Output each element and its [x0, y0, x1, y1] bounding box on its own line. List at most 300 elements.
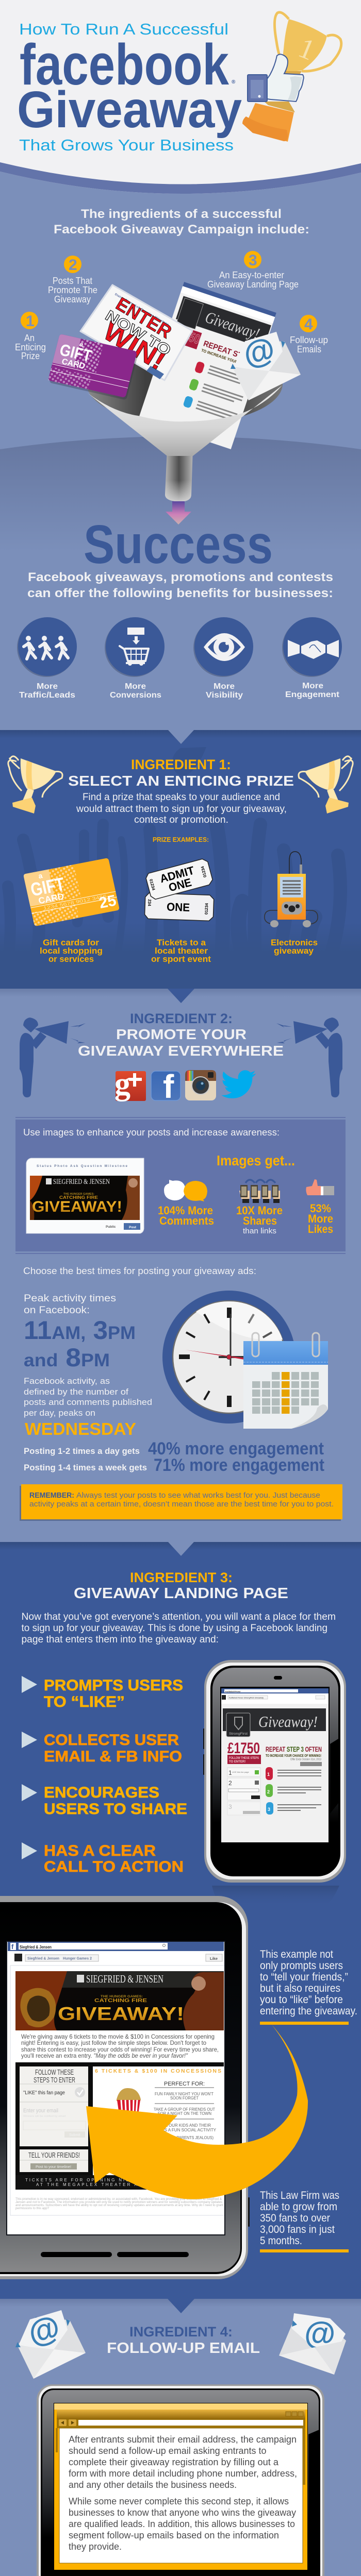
badge 2: 2 [69, 257, 77, 274]
benefit: more engagement [282, 617, 342, 699]
benefit: more visibility [193, 617, 253, 700]
email body text: businesses to know that anyone who wins the giveaway [69, 2507, 296, 2518]
arrow: curved callout arrow [86, 2025, 308, 2199]
title line: that grows your business: That Grows Your Business [19, 136, 234, 154]
bullet: prompts users: TO “LIKE” [44, 1693, 125, 1710]
heading: ingredient 3: INGREDIENT 3: [130, 1570, 233, 1585]
label: or sport event [151, 954, 211, 964]
label: landing page [207, 270, 299, 290]
screenshot: facebook post: Post [129, 1226, 137, 1229]
text: example description: you to “like” before [260, 1994, 343, 2006]
text: ingredient 1 body: Find a prize that speaks to your audience and [83, 792, 280, 803]
stat: peak times: and 8PM [24, 1343, 110, 1372]
post composer card with enter now to win [80, 285, 192, 380]
screen: landing page: REPEAT STEP 3 OFTEN [266, 1745, 322, 1753]
label: posts: Giveaway [54, 294, 91, 304]
tell friends box: TELL YOUR FRIENDS! [28, 2151, 80, 2160]
text: law firm result: 5 months. [260, 2235, 302, 2247]
funnel interior [87, 344, 283, 424]
label [285, 682, 340, 699]
prizes box: 6 TICKETS & $100 IN CONCESSIONS [95, 2068, 221, 2074]
icon: upper ticket [145, 858, 214, 900]
disclaimer [15, 2198, 223, 2210]
icon: popcorn [117, 2088, 141, 2122]
tell friends box: Post to your timeline! [36, 2164, 71, 2169]
registered mark: ® [232, 79, 236, 85]
prize: gift card [23, 858, 120, 964]
prizes box: FOR A NIGHT ON THE TOWN [158, 2111, 211, 2116]
text: facebook activity: defined by the number of [24, 1387, 128, 1397]
label: posts: Promote The [48, 285, 97, 295]
badge 3: 3 [249, 252, 257, 269]
callout: remember [20, 1484, 342, 1521]
screen: landing page: FOLLOW THESE STEPS [229, 1757, 259, 1760]
icon: clock [162, 1291, 296, 1423]
label [19, 682, 75, 700]
label: More [214, 682, 235, 691]
notch into ingredient 4 [168, 2299, 194, 2313]
icon: left trophy [8, 756, 62, 814]
steps box: Submit [69, 2133, 80, 2137]
facebook header bar: f [11, 1943, 14, 1951]
steps box: STEPS TO ENTER [34, 2076, 75, 2084]
icon: right envelope: @ [304, 2316, 335, 2351]
giveaway banner: CATCHING FIRE [94, 1998, 147, 2004]
screen: landing page: Kettlebell Fever StrongFirst Giveaway [229, 1696, 264, 1699]
icon: calendar [243, 1333, 328, 1429]
icon: upper ticket: 01234 [149, 878, 156, 891]
icon: orange gift card: CARD [38, 891, 65, 906]
screen: landing page: 2 [267, 1789, 270, 1794]
icon: lower ticket [144, 893, 214, 921]
screen: landing page: StrongFirst [229, 1733, 248, 1736]
screenshot: facebook post: Public [106, 1225, 116, 1229]
text: 104% More [158, 1204, 213, 1217]
label: landing page: An Easy-to-enter [219, 270, 284, 280]
steps box [20, 2066, 88, 2146]
funnel tube [165, 448, 193, 502]
tickets footer strip: AT THE MEGAPLEX THEATER AT THE GATEWAY [36, 2182, 191, 2187]
heading: ingredient 2 [78, 1011, 284, 1059]
badge 2 [64, 256, 81, 274]
giveaway description: you'll receive an extra entry. "May the odds be ever in your favor!" [21, 2052, 188, 2059]
heading: ingredient 4 [107, 2324, 260, 2357]
disclaimer: This promotion is in no way sponsored, endorsed or administered by, or associated with, Facebook. You are providing your information to Siegfried & [15, 2198, 222, 2201]
icon: walking people [24, 636, 68, 659]
text [158, 1204, 214, 1227]
purple gift card [47, 334, 139, 400]
screen: facebook giveaway page [6, 1941, 225, 2235]
ingredient list [15, 251, 328, 361]
laptop [4, 2384, 357, 2576]
heading: ingredient 2: INGREDIENT 2: [130, 1011, 233, 1026]
facebook header bar: Siegfried & Jensen [20, 1945, 52, 1950]
text: peak activity: on Facebook: [24, 1305, 90, 1316]
label: More [125, 682, 146, 691]
text: law firm result: able to grow from [260, 2201, 337, 2213]
text: example description: only prompts users [260, 1960, 343, 1972]
screenshot: facebook post: GIVEAWAY! [32, 1198, 122, 1215]
label: prize examples: PRIZE EXAMPLES: [153, 836, 209, 843]
text: ingredient 3 body [22, 1612, 336, 1645]
heading: ingredient 3 [74, 1570, 288, 1602]
tickets footer strip [15, 2175, 224, 2190]
stat: wednesday: WEDNESDAY [25, 1419, 136, 1438]
prizes box: SOON FORGET [170, 2096, 199, 2100]
email body text: segment follow-up emails based on the information [69, 2530, 279, 2540]
bullet: encourages: ENCOURAGES [44, 1784, 159, 1801]
icon: twitter [221, 1070, 256, 1098]
heading: ingredient 1: SELECT AN ENTICING PRIZE [68, 773, 294, 789]
label: More [302, 682, 323, 690]
stat: likes [306, 1179, 334, 1235]
tickets footer strip: TICKETS ARE FOR OPENING NIGHT (THURSDAY) [25, 2178, 180, 2182]
heading: ingredient 2: PROMOTE YOUR [116, 1026, 247, 1042]
icon: speech bubbles [164, 1180, 207, 1201]
icon: left megaphone man [20, 1018, 86, 1097]
browser window [54, 2403, 307, 2570]
icon: facebook: f [163, 1068, 174, 1105]
label: enticing prize: Enticing [15, 342, 46, 352]
page nav [10, 1954, 224, 2215]
bullet: call to action: HAS A CLEAR [44, 1842, 156, 1859]
post composer card with enter now to win: WIN! [98, 316, 171, 376]
text: peak activity [24, 1293, 116, 1316]
badge 1 [21, 312, 38, 330]
steps box: FOLLOW THESE [35, 2068, 74, 2077]
purple gift card: GIFT [58, 340, 94, 365]
bullet: collects email: COLLECTS USER [44, 1732, 179, 1749]
label [40, 938, 103, 964]
icon: phones in hands [239, 1180, 280, 1203]
heading: ingredients intro: The ingredients of a successful [81, 207, 282, 221]
text: ingredient 3 body: Now that you’ve got everyone’s attention, you will want a place for them [22, 1612, 336, 1622]
landing page card: REPEAT STEP 3 [202, 339, 258, 365]
email body text: form with more detail including phone number, address, [69, 2468, 297, 2479]
bullet: encourages: USERS TO SHARE [44, 1801, 187, 1818]
heading: ingredients intro: Facebook Giveaway Campaign include: [54, 223, 309, 236]
landing page card [139, 282, 276, 449]
prizes box: TAKE A GROUP OF FRIENDS OUT [154, 2107, 215, 2112]
label: posts: Posts That [53, 276, 92, 286]
benefit: more conversions [105, 617, 165, 700]
title block [17, 20, 242, 154]
icon: orange gift card: 1234 5678 9012 3456 [43, 893, 107, 911]
purple gift card: a [78, 340, 85, 348]
screen: landing page: 2 [228, 1780, 232, 1787]
label: Traffic/Leads [19, 691, 75, 700]
text: Shares [243, 1214, 277, 1227]
landing page card: Giveaway! [203, 308, 262, 343]
text: ingredient 1 body: would attract them to sign up for your giveaway, [76, 804, 287, 815]
prizes box: FUN FAMILY NIGHT YOU WON'T [155, 2092, 214, 2096]
post composer card with enter now to win: NOW TO [102, 308, 174, 359]
screen: landing page: 1 [267, 1772, 270, 1777]
giveaway description: share this contest to increase your odds of winning! For every time you share, [21, 2046, 219, 2053]
page nav: Siegfried & Jensen [27, 1956, 59, 1961]
badge 4 [300, 315, 317, 333]
label: posts [48, 276, 97, 304]
bullet: call to action [22, 1842, 184, 1875]
text: use images: Use images to enhance your posts and increase awareness: [23, 1127, 280, 1138]
icon: upper ticket: 01234 [200, 866, 207, 878]
notch into ingredient 3 [168, 1542, 194, 1556]
prize: electronics [265, 852, 318, 956]
email body text [69, 2434, 297, 2552]
disclaimer: permissions to this app? [15, 2207, 50, 2210]
icon: orange gift card: a [38, 871, 43, 880]
text: facebook activity: Facebook activity, as [24, 1376, 110, 1386]
funnel with ingredients [47, 282, 301, 524]
bullet: encourages [22, 1784, 187, 1818]
text: benefits intro: can offer the following benefits for businesses: [27, 586, 333, 600]
label: follow-up emails: Emails [297, 344, 321, 354]
post composer card with enter now to win: Status Photo Ask Question Milestone [114, 293, 169, 327]
screen: landing page: 3 [228, 1803, 232, 1810]
social icons [114, 1066, 256, 1105]
screen: landing page: Offer Ends October 31st, 2013 [290, 1758, 321, 1761]
icon: facebook [151, 1068, 180, 1105]
callout: remember: REMEMBER: [29, 1491, 74, 1500]
email body text: are qualified leads. In addition, this allows businesses to [69, 2519, 295, 2529]
phone: siegfried jensen mockup [0, 1896, 250, 2279]
label: follow-up emails: Follow-up [290, 335, 328, 345]
email body text: While some never complete this second step, it allows [69, 2496, 289, 2506]
label [151, 938, 211, 964]
icon: google plus: g [114, 1066, 130, 1101]
disclaimer: and announcements. Subscribers will have the ability to opt out of receiving company updates and announcements at any time. Why do I need to grant [15, 2204, 223, 2207]
purple gift card: CARD [61, 357, 86, 371]
icon: left envelope [15, 2309, 86, 2379]
page nav: Hunger Games 2 [63, 1956, 92, 1961]
badge 1: 1 [26, 313, 35, 330]
screen: landing page: 3 [268, 1807, 270, 1812]
screenshot: facebook post: SIEGFRIED & JENSEN [53, 1178, 110, 1186]
text: ingredient 1 body [76, 792, 287, 825]
funnel front lip [88, 385, 282, 456]
icon: trophy with thumbs up hand [242, 12, 341, 142]
background: cheering crowd silhouettes [0, 747, 361, 989]
steps box: Winners will be notified by email [23, 2115, 65, 2118]
giveaway description [21, 2033, 219, 2059]
text: benefits intro [27, 570, 333, 600]
badge 3 [244, 251, 261, 269]
text: peak activity: Peak activity times [24, 1293, 116, 1304]
screenshot: facebook post: Status Photo Ask Question Milestone [37, 1164, 127, 1168]
title line: how to run a successful: How To Run A Successful [19, 20, 228, 38]
icon: google plus [114, 1066, 146, 1101]
email body text: and any other details the business needs. [69, 2480, 237, 2490]
icon: upper ticket: ADMIT [158, 863, 196, 885]
landing page card: £1750 [171, 325, 202, 347]
bullet: prompts users: PROMPTS USERS [44, 1677, 183, 1694]
tell friends box [20, 2149, 88, 2172]
heading: success: Success [84, 514, 273, 575]
email body text: After entrants submit their email address, the campaign [69, 2434, 297, 2445]
phone: landing page mockup [203, 1660, 346, 1906]
icon: handshake [288, 640, 339, 659]
icon: instagram [185, 1070, 216, 1100]
divider bar bottom [260, 2249, 349, 2252]
prize: tickets [144, 858, 214, 964]
icon: orange gift card [23, 858, 120, 926]
label: enticing prize: An [24, 333, 35, 343]
giveaway banner [15, 1971, 224, 2030]
icon: right envelope [279, 2313, 346, 2375]
text: choose the best times: Choose the best times for posting your giveaway ads: [23, 1265, 256, 1276]
text: ingredient 1 body: contest or promotion. [134, 815, 228, 825]
panel: images stats [15, 1117, 346, 1254]
heading: ingredient 1 [68, 757, 294, 789]
prizes box: TAKE YOUR KIDS AND THEIR [155, 2123, 211, 2128]
email body text: complete their giveaway registration by filling out a [69, 2457, 279, 2467]
icon: right megaphone man [276, 1018, 342, 1097]
heading: ingredient 4: INGREDIENT 4: [129, 2324, 233, 2340]
label [271, 938, 318, 956]
prizes box: FRIENDS AS A FUN SOCIAL ACTIVITY [142, 2128, 217, 2132]
text: than links: than links [243, 1227, 276, 1235]
label: enticing prize: Prize [21, 351, 40, 361]
icon: lower ticket: 01234 [204, 903, 209, 914]
screen: landing page: £1750 [227, 1740, 260, 1757]
label: giveaway [274, 946, 314, 956]
label: local shopping [40, 946, 103, 956]
text: ingredient 3 body: to sign up for your giveaway. This is done by using a Facebook landing [22, 1623, 327, 1634]
stat: engagement daily: Posting 1-2 times a day gets [24, 1446, 140, 1456]
text: example description: but it also requires [260, 1982, 340, 1994]
screen: landing page [221, 1688, 329, 1842]
heading: ingredients intro [54, 207, 309, 236]
icon: trophy with thumbs up hand: 1 [294, 32, 319, 67]
bullet: collects email [22, 1732, 182, 1765]
text: 10X More [236, 1204, 283, 1217]
label [110, 682, 161, 700]
badge 4: 4 [304, 316, 313, 333]
screenshot: facebook post [26, 1158, 144, 1233]
label: Engagement [285, 690, 340, 699]
text: 53% [310, 1202, 331, 1215]
text: Likes [308, 1223, 333, 1235]
bullet: call to action: CALL TO ACTION [44, 1858, 184, 1875]
prizes box: (MAKE OTHER PARENTS JEALOUS) [150, 2136, 214, 2140]
callout: remember: Always test your posts to see what works best for you. Just because [76, 1491, 320, 1500]
screenshot: facebook post: THE HUNGER GAMES: [63, 1193, 94, 1196]
page nav: Like [210, 1956, 218, 1961]
icon: thumb [306, 1179, 334, 1195]
text: facebook activity: per day, peaks on [24, 1408, 95, 1418]
label: or services [48, 954, 94, 964]
heading: images get: Images get... [217, 1153, 295, 1168]
text: facebook activity: posts and comments published [24, 1397, 152, 1407]
stat: peak times [24, 1316, 136, 1372]
text: More [308, 1212, 333, 1225]
label: Gift cards for [43, 938, 99, 947]
title word: facebook: facebook [20, 32, 229, 97]
label: Electronics [271, 938, 318, 947]
screen: landing page: LIKE this fan page [232, 1771, 249, 1773]
giveaway banner: SIEGFRIED & JENSEN [86, 1973, 163, 1985]
label: landing page: Giveaway Landing Page [207, 279, 299, 290]
stat: engagement daily: 40% more engagement [148, 1439, 324, 1459]
email body text: should send a follow-up email asking entrants to [69, 2446, 266, 2456]
text: ingredient 3 body: page that enters them into the giveaway and: [22, 1634, 219, 1645]
notch into ingredient 1 [168, 730, 194, 744]
notch into ingredient 2 [168, 989, 194, 1003]
text: law firm result: 3,000 fans in just [260, 2224, 335, 2235]
giveaway description: We're giving away 6 tickets to the movie & $100 in Concessions for opening [21, 2033, 215, 2040]
icon: lower ticket: 234 [147, 899, 152, 906]
disclaimer: Jensen and not to Facebook. The information you provide will only be used to notify promotion winners and for sending subscribers company updates [15, 2201, 222, 2204]
open envelope with at sign [231, 330, 301, 400]
label: Conversions [110, 691, 161, 700]
icon: eye [204, 633, 245, 661]
stat: comments [158, 1180, 214, 1227]
steps box: Enter your email [23, 2108, 58, 2114]
text: Comments [159, 1214, 214, 1227]
heading: ingredient 4: FOLLOW-UP EMAIL [107, 2340, 260, 2357]
text: law firm result: This Law Firm was [260, 2190, 339, 2201]
icon: lower ticket: ONE [167, 900, 190, 914]
giveaway description: night! Entering is easy, just follow the simple steps below. Don't forget to [21, 2039, 206, 2046]
label: Visibility [206, 691, 243, 700]
giveaway banner: THE HUNGER GAMES: [101, 1995, 143, 1998]
stat: shares [236, 1180, 283, 1235]
icon: orange gift card: GIFT [28, 873, 67, 900]
landing page card: TO INCREASE YOUR CHANCE [201, 348, 255, 370]
bullet: collects email: EMAIL & FB INFO [44, 1748, 182, 1765]
label: More [37, 682, 58, 691]
text [236, 1204, 283, 1227]
giveaway banner: GIVEAWAY! [58, 2003, 184, 2024]
open envelope with at sign: @ [239, 330, 279, 373]
divider bar top [260, 2022, 349, 2025]
screen: landing page: TO ENTER! [229, 1760, 245, 1764]
icon: left envelope: @ [24, 2309, 64, 2351]
heading: ingredient 3: GIVEAWAY LANDING PAGE [74, 1585, 288, 1602]
screen: landing page: Giveaway! [258, 1713, 318, 1731]
stat: peak times: 11AM, 3PM [24, 1316, 136, 1345]
text: example description [260, 1948, 357, 2017]
label: local theater [155, 946, 208, 956]
laptop screen [37, 2384, 324, 2576]
stat: engagement daily [24, 1439, 324, 1459]
callout: remember: activity peaks at a certain time, doesn’t mean those are the best time for you to post. [29, 1500, 334, 1509]
text: law firm result [260, 2190, 339, 2247]
stat: engagement weekly [24, 1455, 324, 1475]
benefit: more traffic leads [17, 617, 77, 700]
text: example description: to “tell your friends,” [260, 1971, 348, 1983]
label [206, 682, 243, 700]
text: facebook activity [24, 1376, 152, 1418]
heading: ingredient 2: GIVEAWAY EVERYWHERE [78, 1043, 284, 1059]
text: law firm result: 350 fans to over [260, 2212, 330, 2224]
icon: orange gift card: 25 [97, 892, 118, 912]
icon: upper ticket: ONE [167, 876, 193, 894]
stat: engagement weekly: 71% more engagement [154, 1455, 324, 1475]
label: Tickets to a [157, 938, 206, 947]
label: enticing prize [15, 333, 46, 361]
post composer card with enter now to win: ENTER [112, 293, 175, 343]
text [308, 1202, 333, 1235]
screenshot: facebook post: CATCHING FIRE [59, 1195, 99, 1200]
arrow to success [166, 501, 191, 524]
icon: music player [265, 852, 318, 927]
icon: right trophy [299, 756, 353, 814]
icon: shopping cart [120, 628, 149, 666]
screen: landing page: TO INCREASE YOUR CHANCE OF WINNING! [266, 1754, 321, 1758]
stat: engagement weekly: Posting 1-4 times a week gets [24, 1463, 147, 1472]
steps box: "LIKE" this fan page [23, 2090, 65, 2096]
